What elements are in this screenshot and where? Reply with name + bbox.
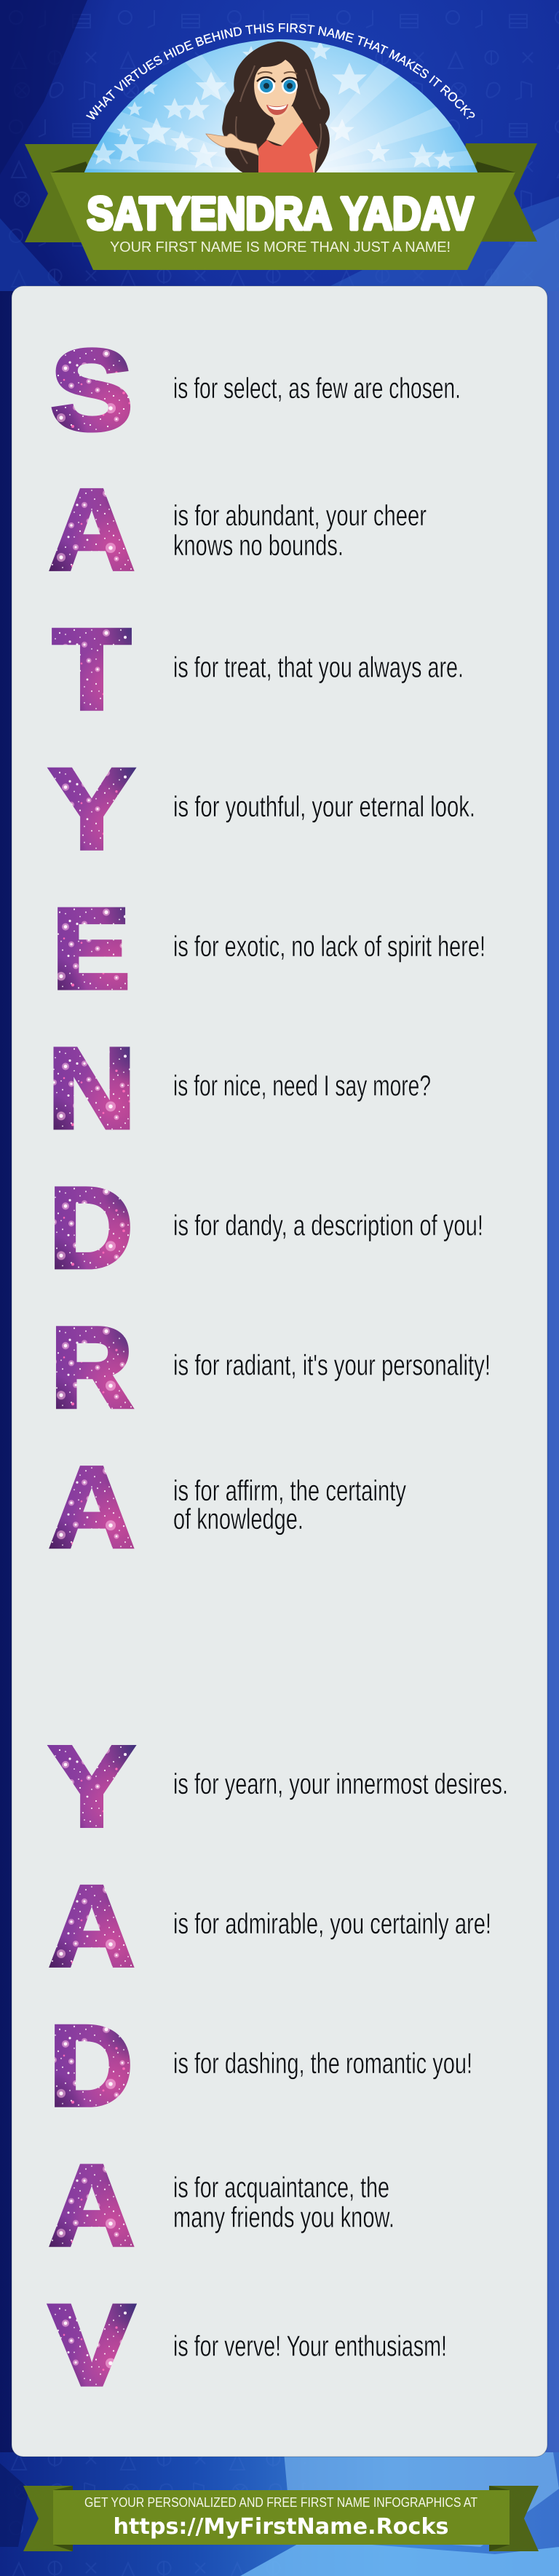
row D second [49, 2003, 472, 2130]
row Y second name: Y [49, 1723, 134, 1850]
row A [49, 466, 427, 594]
row A: knows no bounds. [173, 530, 344, 562]
row D second: D [49, 2003, 132, 2130]
row S: S [51, 327, 132, 454]
row A third: A [49, 1863, 134, 1990]
row T: T [52, 606, 131, 734]
row A second: of knowledge. [173, 1503, 304, 1535]
stars [91, 41, 454, 169]
row V: is for verve! Your enthusiasm! [173, 2331, 447, 2363]
row V: V [49, 2282, 134, 2409]
ribbon tails [25, 143, 537, 242]
row A third [49, 1863, 491, 1990]
row Y second name [49, 1723, 508, 1850]
row A second: is for affirm, the certainty [173, 1475, 406, 1507]
footer call to action: GET YOUR PERSONALIZED AND FREE FIRST NAME INFOGRAPHICS AT [84, 2495, 477, 2510]
hand and left arm [206, 134, 259, 156]
footer ribbon [23, 2486, 539, 2551]
row A fourth: A [49, 2142, 134, 2270]
main ribbon [50, 172, 515, 270]
face [254, 60, 297, 118]
name title: SATYENDRA YADAV [87, 188, 473, 239]
dome with light burst [84, 39, 477, 172]
row A: is for abundant, your cheer [173, 500, 427, 532]
row N [48, 1025, 431, 1153]
row A fourth: many friends you know. [173, 2202, 395, 2234]
row A second: A [49, 1444, 134, 1571]
light rays [86, 55, 475, 171]
mouth [266, 104, 288, 115]
row S [51, 327, 461, 454]
row A second [49, 1444, 406, 1571]
footer url: https://MyFirstName.Rocks [114, 2514, 448, 2540]
row D [49, 1164, 483, 1292]
row Y [49, 746, 475, 873]
row Y: Y [49, 746, 134, 873]
row N: is for nice, need I say more? [173, 1070, 431, 1102]
row E: E [52, 886, 130, 1013]
row V [49, 2282, 447, 2409]
row A: A [49, 466, 134, 594]
row R: R [51, 1304, 132, 1431]
neck and chest [266, 106, 303, 146]
row A fourth [49, 2142, 395, 2270]
row T [52, 606, 464, 734]
row E [52, 886, 485, 1013]
hair [222, 41, 330, 175]
row D: D [49, 1164, 132, 1292]
eyes [257, 72, 298, 94]
right arm [309, 149, 317, 172]
curved tagline: WHAT VIRTUES HIDE BEHIND THIS FIRST NAME THAT MAKES IT ROCK? [86, 23, 475, 119]
shirt [258, 122, 318, 173]
row N: N [48, 1025, 135, 1153]
row A fourth: is for acquaintance, the [173, 2172, 389, 2204]
row R [51, 1304, 491, 1431]
subtitle: YOUR FIRST NAME IS MORE THAN JUST A NAME! [110, 239, 451, 255]
character [206, 41, 330, 175]
